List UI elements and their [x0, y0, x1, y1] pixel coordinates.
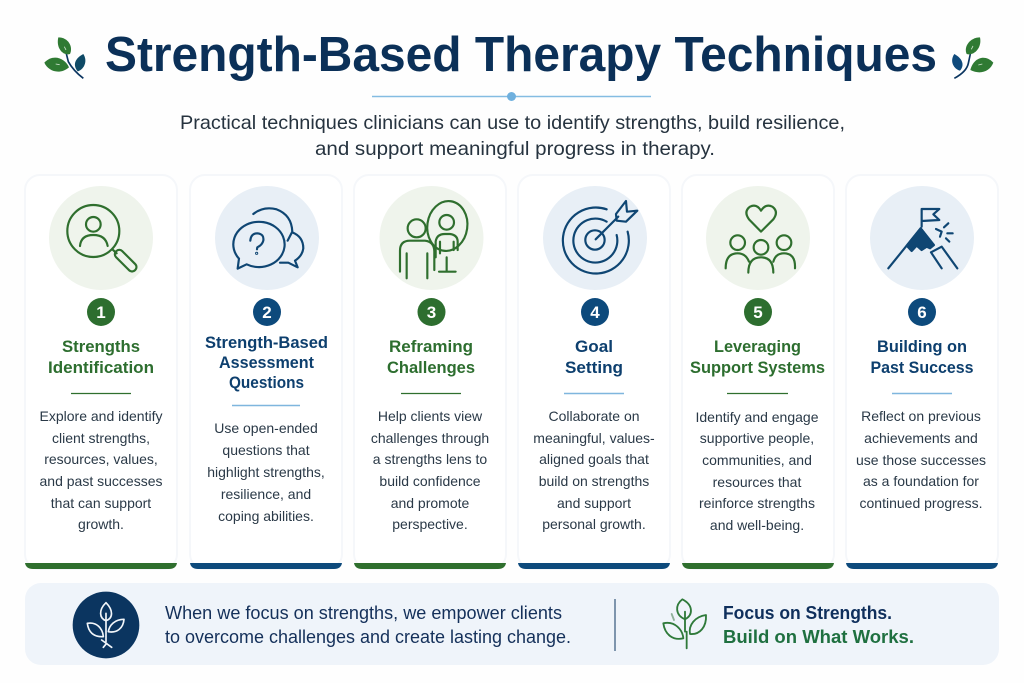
heading: Reframing	[389, 337, 473, 356]
panel: 1 Strengths Identification	[25, 175, 177, 569]
subtitle	[180, 112, 845, 160]
icon: left leaf sprig	[44, 37, 85, 78]
heading: Building on	[877, 337, 967, 356]
message text	[165, 603, 571, 647]
panel: 4 Goal Setting: 4	[590, 303, 600, 322]
heading: Support Systems	[690, 358, 825, 377]
body text: challenges through	[371, 430, 489, 446]
divider with dot	[372, 92, 651, 101]
heading	[565, 337, 623, 377]
icon: mountain with flag	[888, 209, 957, 268]
subtitle: and support meaningful progress in therapy.	[315, 138, 715, 160]
body text: resources, values,	[44, 451, 158, 467]
panel: 6 Building on Past Success: 6	[917, 303, 927, 322]
body text: continued progress.	[860, 495, 982, 511]
body text: build confidence	[379, 473, 481, 489]
body text: and well-being.	[710, 517, 804, 533]
body text: and past successes	[40, 473, 162, 489]
body text: Reflect on previous	[861, 408, 981, 424]
heading	[690, 337, 825, 377]
icon: plant in navy circle	[73, 592, 139, 658]
heading	[870, 337, 974, 377]
panel: 3 Reframing Challenges: 3	[427, 303, 436, 322]
heading	[205, 333, 328, 392]
heading: Challenges	[387, 358, 475, 377]
title: Strength-Based Therapy Techniques	[105, 28, 937, 82]
panel: 3 Reframing Challenges	[354, 175, 506, 569]
body text: growth.	[78, 516, 124, 532]
heading	[48, 337, 154, 377]
body text: as a foundation for	[863, 473, 979, 489]
body text	[696, 409, 819, 533]
icon: three people with heart	[726, 206, 795, 273]
heading: Questions	[229, 373, 304, 392]
body text: that can support	[51, 495, 151, 511]
body text: Help clients view	[378, 408, 483, 424]
heading: Strength-Based	[205, 333, 328, 352]
body text	[856, 408, 986, 511]
body text: achievements and	[864, 430, 978, 446]
icon: magnifying glass with person	[67, 205, 138, 273]
heading	[387, 337, 475, 377]
panel: 5 Leveraging Support Systems: 5	[753, 303, 763, 322]
body text	[207, 420, 325, 524]
panel: 2 Strength-Based Assessment Questions: 2	[262, 303, 272, 322]
icon: person facing mirror	[400, 198, 471, 278]
subtitle: Practical techniques clinicians can use to identify strengths, build resilience,	[180, 112, 845, 134]
tagline	[723, 603, 914, 647]
body text: a strengths lens to	[373, 451, 487, 467]
body text: Collaborate on	[548, 408, 640, 424]
body text	[371, 408, 489, 532]
icon: target with arrow	[563, 201, 637, 274]
heading: Leveraging	[714, 337, 801, 356]
body text: Use open-ended	[214, 420, 318, 436]
body text: personal growth.	[542, 516, 646, 532]
icon: speech bubbles with question mark	[233, 208, 303, 269]
heading: Past Success	[870, 358, 974, 377]
body text: perspective.	[392, 516, 468, 532]
panel: 5 Leveraging Support Systems	[682, 175, 834, 569]
body text: Identify and engage	[696, 409, 819, 425]
tagline: Build on What Works.	[723, 627, 914, 647]
panel: 1 Strengths Identification: 1	[96, 303, 106, 322]
panel: 2 Strength-Based Assessment Questions	[190, 175, 342, 569]
heading: Setting	[565, 358, 623, 377]
icon: green plant	[663, 599, 706, 648]
body text: resources that	[713, 474, 801, 490]
tagline: Focus on Strengths.	[723, 603, 892, 623]
icon: right leaf sprig	[952, 37, 993, 78]
body text: questions that	[222, 442, 310, 458]
heading: Strengths	[62, 337, 140, 356]
body text: aligned goals that	[539, 451, 649, 467]
body text: client strengths,	[52, 430, 150, 446]
body text: communities, and	[702, 452, 812, 468]
body text: and promote	[391, 495, 470, 511]
body text: highlight strengths,	[207, 464, 325, 480]
heading: Assessment	[219, 353, 314, 372]
body text: use those successes	[856, 452, 986, 468]
body text: meaningful, values-	[533, 430, 655, 446]
body text: Explore and identify	[40, 408, 162, 424]
body text: reinforce strengths	[699, 495, 815, 511]
message text: When we focus on strengths, we empower clients	[165, 603, 562, 623]
body text: coping abilities.	[218, 508, 314, 524]
body text: resilience, and	[221, 486, 311, 502]
panel: 6 Building on Past Success	[846, 175, 998, 569]
heading: Goal	[575, 337, 613, 356]
panel: 4 Goal Setting	[518, 175, 670, 569]
body text	[40, 408, 162, 532]
panel: footer banner	[25, 583, 999, 665]
body text: and support	[557, 495, 631, 511]
heading: Identification	[48, 358, 154, 377]
body text: build on strengths	[539, 473, 649, 489]
message text: to overcome challenges and create lasting change.	[165, 627, 571, 647]
body text	[533, 408, 655, 532]
body text: supportive people,	[700, 430, 814, 446]
